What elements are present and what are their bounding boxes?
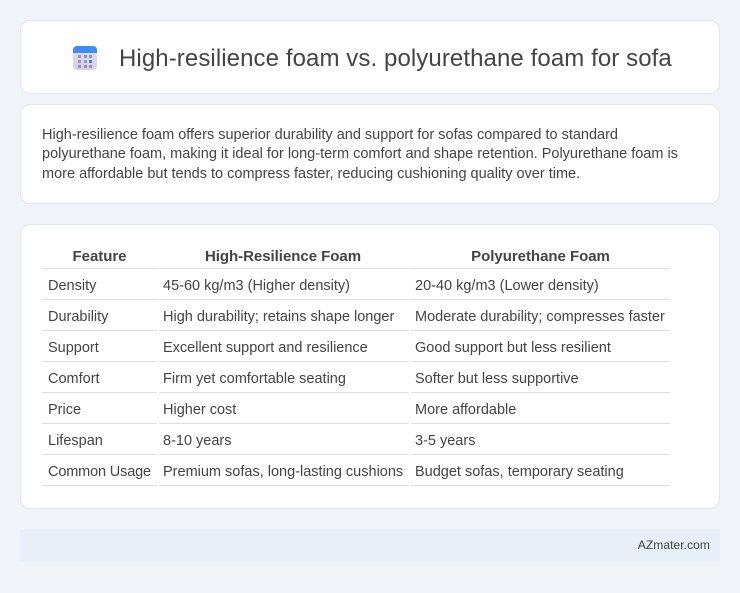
row: price: Higher cost [163, 402, 236, 418]
row: common usage: Common Usage [48, 464, 151, 480]
table header: High-Resilience Foam [205, 248, 361, 265]
row: common usage: Premium sofas, long-lasting cushions [163, 464, 403, 480]
table header [42, 248, 670, 269]
row: common usage: Budget sofas, temporary seating [415, 464, 624, 480]
title: High-resilience foam vs. polyurethane foam for sofa [119, 45, 672, 72]
row: durability: High durability; retains shape longer [163, 309, 394, 325]
summary paragraph: polyurethane foam, making it ideal for long-term comfort and shape retention. Polyurethane foam is [42, 146, 678, 162]
row: durability: Moderate durability; compresses faster [415, 309, 665, 325]
row: density [42, 278, 670, 300]
row: lifespan: 8-10 years [163, 433, 232, 449]
row: lifespan: Lifespan [48, 433, 103, 449]
summary paragraph [42, 127, 678, 182]
row: lifespan: 3-5 years [415, 433, 475, 449]
panel: comparison table [20, 224, 720, 509]
row: comfort [42, 371, 670, 393]
row: durability [42, 309, 670, 331]
row: lifespan [42, 433, 670, 455]
row: comfort: Firm yet comfortable seating [163, 371, 346, 387]
table header: Polyurethane Foam [471, 248, 610, 265]
row: support: Good support but less resilient [415, 340, 611, 356]
row: price: More affordable [415, 402, 516, 418]
panel: summary text [20, 104, 720, 204]
footer bar [20, 529, 720, 562]
summary paragraph: more affordable but tends to compress faster, reducing cushioning quality over time. [42, 166, 580, 182]
panel: title card [20, 20, 720, 94]
row: comfort: Comfort [48, 371, 100, 387]
row: price [42, 402, 670, 424]
icon: calendar grid [73, 46, 97, 70]
row: density: Density [48, 278, 96, 294]
row: durability: Durability [48, 309, 108, 325]
row: support: Excellent support and resilience [163, 340, 368, 356]
row: comfort: Softer but less supportive [415, 371, 579, 387]
row: price: Price [48, 402, 81, 418]
footer brand: AZmater.com [638, 538, 710, 552]
row: density: 20-40 kg/m3 (Lower density) [415, 278, 599, 294]
table header: Feature [72, 248, 126, 265]
row: support: Support [48, 340, 99, 356]
row: density: 45-60 kg/m3 (Higher density) [163, 278, 350, 294]
row: support [42, 340, 670, 362]
row: common usage [42, 464, 670, 486]
summary paragraph: High-resilience foam offers superior durability and support for sofas compared to standard [42, 127, 618, 143]
